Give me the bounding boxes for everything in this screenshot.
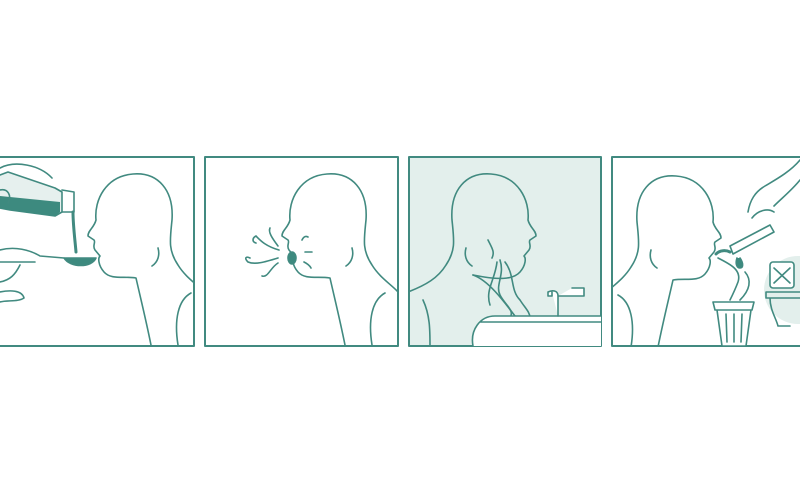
icon: spit into bin (718, 258, 749, 300)
icon: hand with dropper (730, 160, 800, 268)
illustration strip (0, 156, 800, 347)
panel 4: disposal (605, 157, 800, 347)
icon: breath lines (246, 228, 312, 276)
panel 3: spitting into sink (408, 157, 601, 346)
icon: bottle (0, 164, 74, 216)
icon: sink and tap (472, 288, 601, 346)
icon: trash bin (713, 302, 754, 346)
panel 1: pouring medicine into spoon (0, 157, 204, 346)
icon: crossed toilet (764, 256, 800, 326)
icon: liquid stream and spoon (0, 212, 96, 302)
panel 2: exhaling (205, 157, 398, 346)
icon: spit stream (489, 260, 530, 318)
